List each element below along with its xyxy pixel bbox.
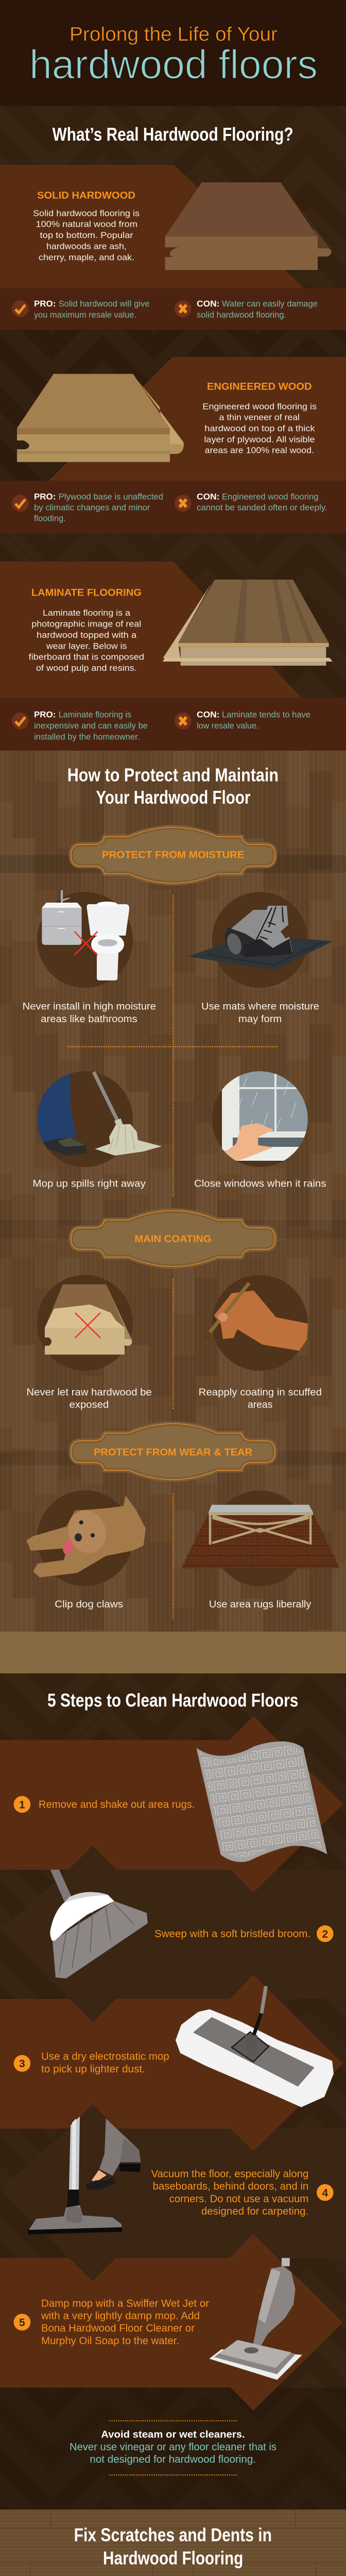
panel: step 1 xyxy=(0,1716,343,1893)
step 4 text: corners. Do not use a vacuum xyxy=(169,2193,308,2205)
panel: solid hardwood xyxy=(0,165,331,288)
caption: clip dog claws: Clip dog claws xyxy=(55,1599,123,1610)
pro text xyxy=(34,710,148,741)
text: engineered wood description: hardwood on top of a thick xyxy=(204,423,315,433)
callout: avoid steam: Avoid steam or wet cleaners. xyxy=(101,2429,245,2441)
caption: use mats: may form xyxy=(238,1014,282,1025)
caption: never install: Never install in high moisture xyxy=(23,1001,156,1012)
text: engineered wood description: Engineered wood flooring is xyxy=(202,401,317,411)
illustration: bench on rug xyxy=(181,1490,340,1586)
step 4 text: designed for carpeting. xyxy=(201,2206,308,2217)
icon: pro check xyxy=(12,713,29,730)
icon: con cross xyxy=(175,300,192,317)
pro text: Laminate flooring is xyxy=(59,710,131,720)
caption: mop up: Mop up spills right away xyxy=(32,1178,146,1189)
illustration: hand with touch up pen xyxy=(205,1275,308,1371)
lower part of the infographic xyxy=(0,1673,346,2576)
caption: reapply coating xyxy=(199,1387,322,1410)
step 2 text: Sweep with a soft bristled broom. xyxy=(154,1928,310,1940)
text: laminate description: of wood pulp and resins. xyxy=(36,663,137,673)
caption: use mats: Use mats where moisture xyxy=(201,1001,319,1012)
caption: never install xyxy=(23,1001,156,1025)
heading: fix scratches xyxy=(74,2524,272,2568)
pro text: Plywood base is unaffected xyxy=(59,492,163,501)
text: engineered wood description: a thin veneer of real xyxy=(219,413,300,422)
heading: what's real hardwood flooring: What’s Real Hardwood Flooring? xyxy=(53,124,293,145)
text: laminate description: hardwood topped with a xyxy=(37,630,137,640)
text: engineered wood description: ENGINEERED WOOD xyxy=(207,381,312,393)
text: solid hardwood description: Solid hardwood flooring is xyxy=(33,208,140,218)
panel: engineered wood pro and con xyxy=(0,481,346,533)
step number 2 xyxy=(317,1925,334,1942)
step number 5 xyxy=(14,2314,30,2331)
step 4 text: Vacuum the floor, especially along xyxy=(151,2168,308,2180)
step number 3: 3 xyxy=(19,2058,25,2070)
illustration: close window in rain xyxy=(212,1071,309,1167)
caption: never let raw xyxy=(26,1387,152,1410)
pro text: PRO: xyxy=(34,299,56,309)
step number 4 xyxy=(317,2184,334,2201)
caption: never install: areas like bathrooms xyxy=(41,1014,137,1025)
illustration: vacuum and legs xyxy=(28,2116,141,2234)
heading: fix scratches: Hardwood Flooring xyxy=(103,2547,243,2568)
con text: Water can easily damage xyxy=(222,299,318,309)
section: what's real hardwood flooring xyxy=(0,106,346,751)
panel: step 4 band xyxy=(1,2104,346,2281)
section: fix scratches and dents xyxy=(0,2510,346,2576)
step number 1: 1 xyxy=(19,1799,25,1811)
con text xyxy=(197,492,327,513)
con text: Laminate tends to have xyxy=(222,710,310,720)
step 1 text: Remove and shake out area rugs. xyxy=(39,1799,195,1810)
pro text: by climatic changes and minor xyxy=(34,503,150,513)
plaque: protect from wear and tear xyxy=(71,1423,275,1480)
pro text: flooding. xyxy=(34,514,66,523)
icon: con cross xyxy=(175,495,192,512)
illustration: dog xyxy=(26,1490,146,1586)
illustration: solid hardwood plank xyxy=(165,182,331,270)
panel: step 5 xyxy=(0,2234,343,2411)
plaque: main coating: MAIN COATING xyxy=(134,1233,212,1245)
illustration: laminate plank xyxy=(163,580,333,666)
caption: use area rugs: Use area rugs liberally xyxy=(209,1599,312,1610)
text: laminate description: Laminate flooring is a xyxy=(43,608,131,618)
heading: 5 steps: 5 Steps to Clean Hardwood Floors xyxy=(47,1689,298,1710)
heading: how to protect: How to Protect and Maintain xyxy=(67,765,279,786)
heading: fix scratches: Fix Scratches and Dents in xyxy=(74,2524,272,2546)
text: solid hardwood description: 100% natural wood from xyxy=(36,219,137,229)
illustration: mop and jeans xyxy=(31,1071,162,1167)
divider band xyxy=(0,1632,346,1673)
illustration: vanity and toilet xyxy=(37,890,133,988)
step 5 text: with a very lightly damp mop. Add xyxy=(41,2311,200,2322)
illustration: boots on mat xyxy=(187,892,333,988)
icon: red x xyxy=(74,931,97,955)
illustration: wet mop xyxy=(209,2258,302,2380)
pro text: installed by the homeowner. xyxy=(34,732,140,741)
illustration: rug xyxy=(196,1741,327,1862)
icon: pro check xyxy=(12,495,29,512)
panel: engineered wood xyxy=(17,357,346,481)
heading: how to protect: Your Hardwood Floor xyxy=(96,787,250,808)
caption: reapply coating: areas xyxy=(248,1399,272,1410)
section: 5 steps to clean xyxy=(0,1673,346,2510)
step 5 text: Damp mop with a Swiffer Wet Jet or xyxy=(41,2298,209,2310)
step number 5: 5 xyxy=(19,2317,25,2329)
caption: never let raw: exposed xyxy=(70,1399,109,1410)
text: laminate description: wear layer. Below is xyxy=(46,641,127,651)
step 5 text xyxy=(41,2298,209,2347)
con text: low resale value. xyxy=(197,721,258,731)
text: solid hardwood description: top to bottom. Popular xyxy=(40,230,133,240)
panel: laminate pro and con xyxy=(0,698,346,751)
plaque: protect from moisture: PROTECT FROM MOISTURE xyxy=(102,850,244,861)
step number 2: 2 xyxy=(322,1928,328,1940)
pro text: PRO: xyxy=(34,492,56,501)
text: solid hardwood description: cherry, maple, and oak. xyxy=(39,252,134,262)
icon: red x xyxy=(75,1313,100,1338)
step 5 text: Bona Hardwood Floor Cleaner or xyxy=(41,2323,195,2334)
illustration: broom xyxy=(50,1870,148,1978)
illustration: dry mop xyxy=(176,1986,334,2107)
pro text xyxy=(34,299,150,319)
plaque: protect from wear and tear: PROTECT FROM WEAR & TEAR xyxy=(94,1447,252,1458)
pro text xyxy=(34,492,163,523)
title line: hardwood floors: hardwood floors xyxy=(29,41,318,87)
step 3 text: to pick up lighter dust. xyxy=(41,2064,145,2075)
heading: how to protect xyxy=(67,765,279,808)
title line: Prolong the Life of Your: Prolong the Life of Your xyxy=(70,24,278,45)
text: solid hardwood description: SOLID HARDWOOD xyxy=(37,190,135,201)
con text: CON: xyxy=(197,299,219,309)
pro text: you maximum resale value. xyxy=(34,310,136,319)
step 3 text: Use a dry electrostatic mop xyxy=(41,2051,169,2062)
text: engineered wood description xyxy=(202,381,317,455)
pro text: PRO: xyxy=(34,710,56,720)
pro text: inexpensive and can easily be xyxy=(34,721,148,731)
step 3 text xyxy=(41,2051,169,2075)
callout: avoid steam: not designed for hardwood flooring. xyxy=(90,2454,256,2465)
panel: step 2 band xyxy=(2,1845,346,2022)
step 5 text: Murphy Oil Soap to the water. xyxy=(41,2335,179,2347)
text: laminate description: LAMINATE FLOORING xyxy=(31,587,142,599)
text: laminate description: fiberboard that is composed xyxy=(29,652,144,662)
con text: CON: xyxy=(197,710,219,720)
pro text: Solid hardwood will give xyxy=(59,299,150,309)
illustration: raw hardwood plank xyxy=(37,1275,133,1371)
caption: use mats xyxy=(201,1001,319,1025)
icon: con cross xyxy=(175,713,192,730)
step 4 text xyxy=(151,2168,308,2217)
con text xyxy=(197,710,310,731)
step 4 text: baseboards, behind doors, and in xyxy=(153,2181,308,2192)
text: engineered wood description: areas are 100% real wood. xyxy=(205,446,314,455)
caption: close windows: Close windows when it rains xyxy=(194,1178,326,1189)
upper part of the infographic xyxy=(0,0,346,1673)
callout: avoid steam xyxy=(70,2421,276,2475)
con text: cannot be sanded often or deeply. xyxy=(197,503,327,513)
caption: never let raw: Never let raw hardwood be xyxy=(26,1387,152,1398)
plaque: protect from moisture xyxy=(71,827,275,883)
panel: solid hardwood pro and con xyxy=(0,288,346,330)
step number 4: 4 xyxy=(322,2187,328,2199)
panel: step 3 xyxy=(0,1975,343,2151)
text: solid hardwood description xyxy=(33,190,140,262)
plaque: main coating xyxy=(71,1211,275,1266)
section: title header xyxy=(0,0,346,106)
callout: avoid steam: Never use vinegar or any floor cleaner that is xyxy=(70,2442,276,2453)
text: laminate description xyxy=(29,587,144,673)
con text: CON: xyxy=(197,492,219,501)
dotted dividers xyxy=(68,896,278,1620)
con text: solid hardwood flooring. xyxy=(197,310,286,319)
step number 3 xyxy=(14,2055,30,2072)
text: engineered wood description: layer of plywood. All visible xyxy=(204,434,315,444)
step number 1 xyxy=(14,1796,30,1813)
illustration: engineered wood plank xyxy=(17,374,184,462)
icon: pro check xyxy=(12,300,29,317)
section: how to protect and maintain xyxy=(0,751,346,1632)
con text xyxy=(197,299,318,319)
caption: reapply coating: Reapply coating in scuffed xyxy=(199,1387,322,1398)
text: laminate description: photographic image of real xyxy=(31,619,141,629)
panel: laminate flooring xyxy=(0,562,333,698)
con text: Engineered wood flooring xyxy=(222,492,318,501)
text: solid hardwood description: hardwoods are ash, xyxy=(46,241,127,251)
